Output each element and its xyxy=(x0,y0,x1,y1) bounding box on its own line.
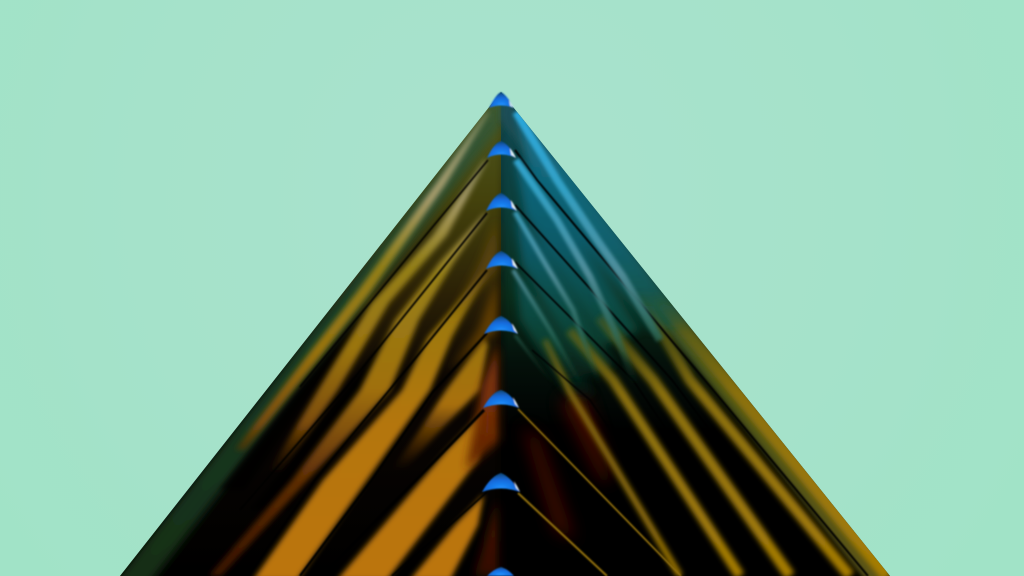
right face black creases xyxy=(515,150,868,576)
pyramid body xyxy=(100,90,901,576)
centre ridge xyxy=(496,180,504,567)
node 7 xyxy=(482,473,520,492)
right face base xyxy=(501,90,901,576)
infographic: pyramid artwork xyxy=(120,91,890,576)
right face dark red shadows xyxy=(522,395,612,540)
node 6 xyxy=(483,390,519,408)
left face brown shading near ridge xyxy=(450,220,500,576)
node 8 xyxy=(487,567,514,576)
right face thin gold lines xyxy=(518,409,681,576)
right face teal fans xyxy=(516,112,690,400)
node 5 xyxy=(484,316,518,334)
right outer edge band xyxy=(501,92,900,576)
left face dark wedges xyxy=(222,256,413,489)
left outer edge band xyxy=(110,92,501,576)
node 4 xyxy=(486,251,518,269)
left face base xyxy=(100,90,501,576)
node 2 xyxy=(487,141,516,158)
node 1 xyxy=(489,92,514,108)
left face gold stripes xyxy=(235,112,489,470)
left face lower gold stripes xyxy=(209,213,488,576)
left crease lines xyxy=(274,159,489,576)
right face bright teal stripes xyxy=(513,112,660,400)
node 3 xyxy=(486,193,517,211)
blue nodes xyxy=(482,92,520,576)
right face gold ribs xyxy=(545,275,888,576)
